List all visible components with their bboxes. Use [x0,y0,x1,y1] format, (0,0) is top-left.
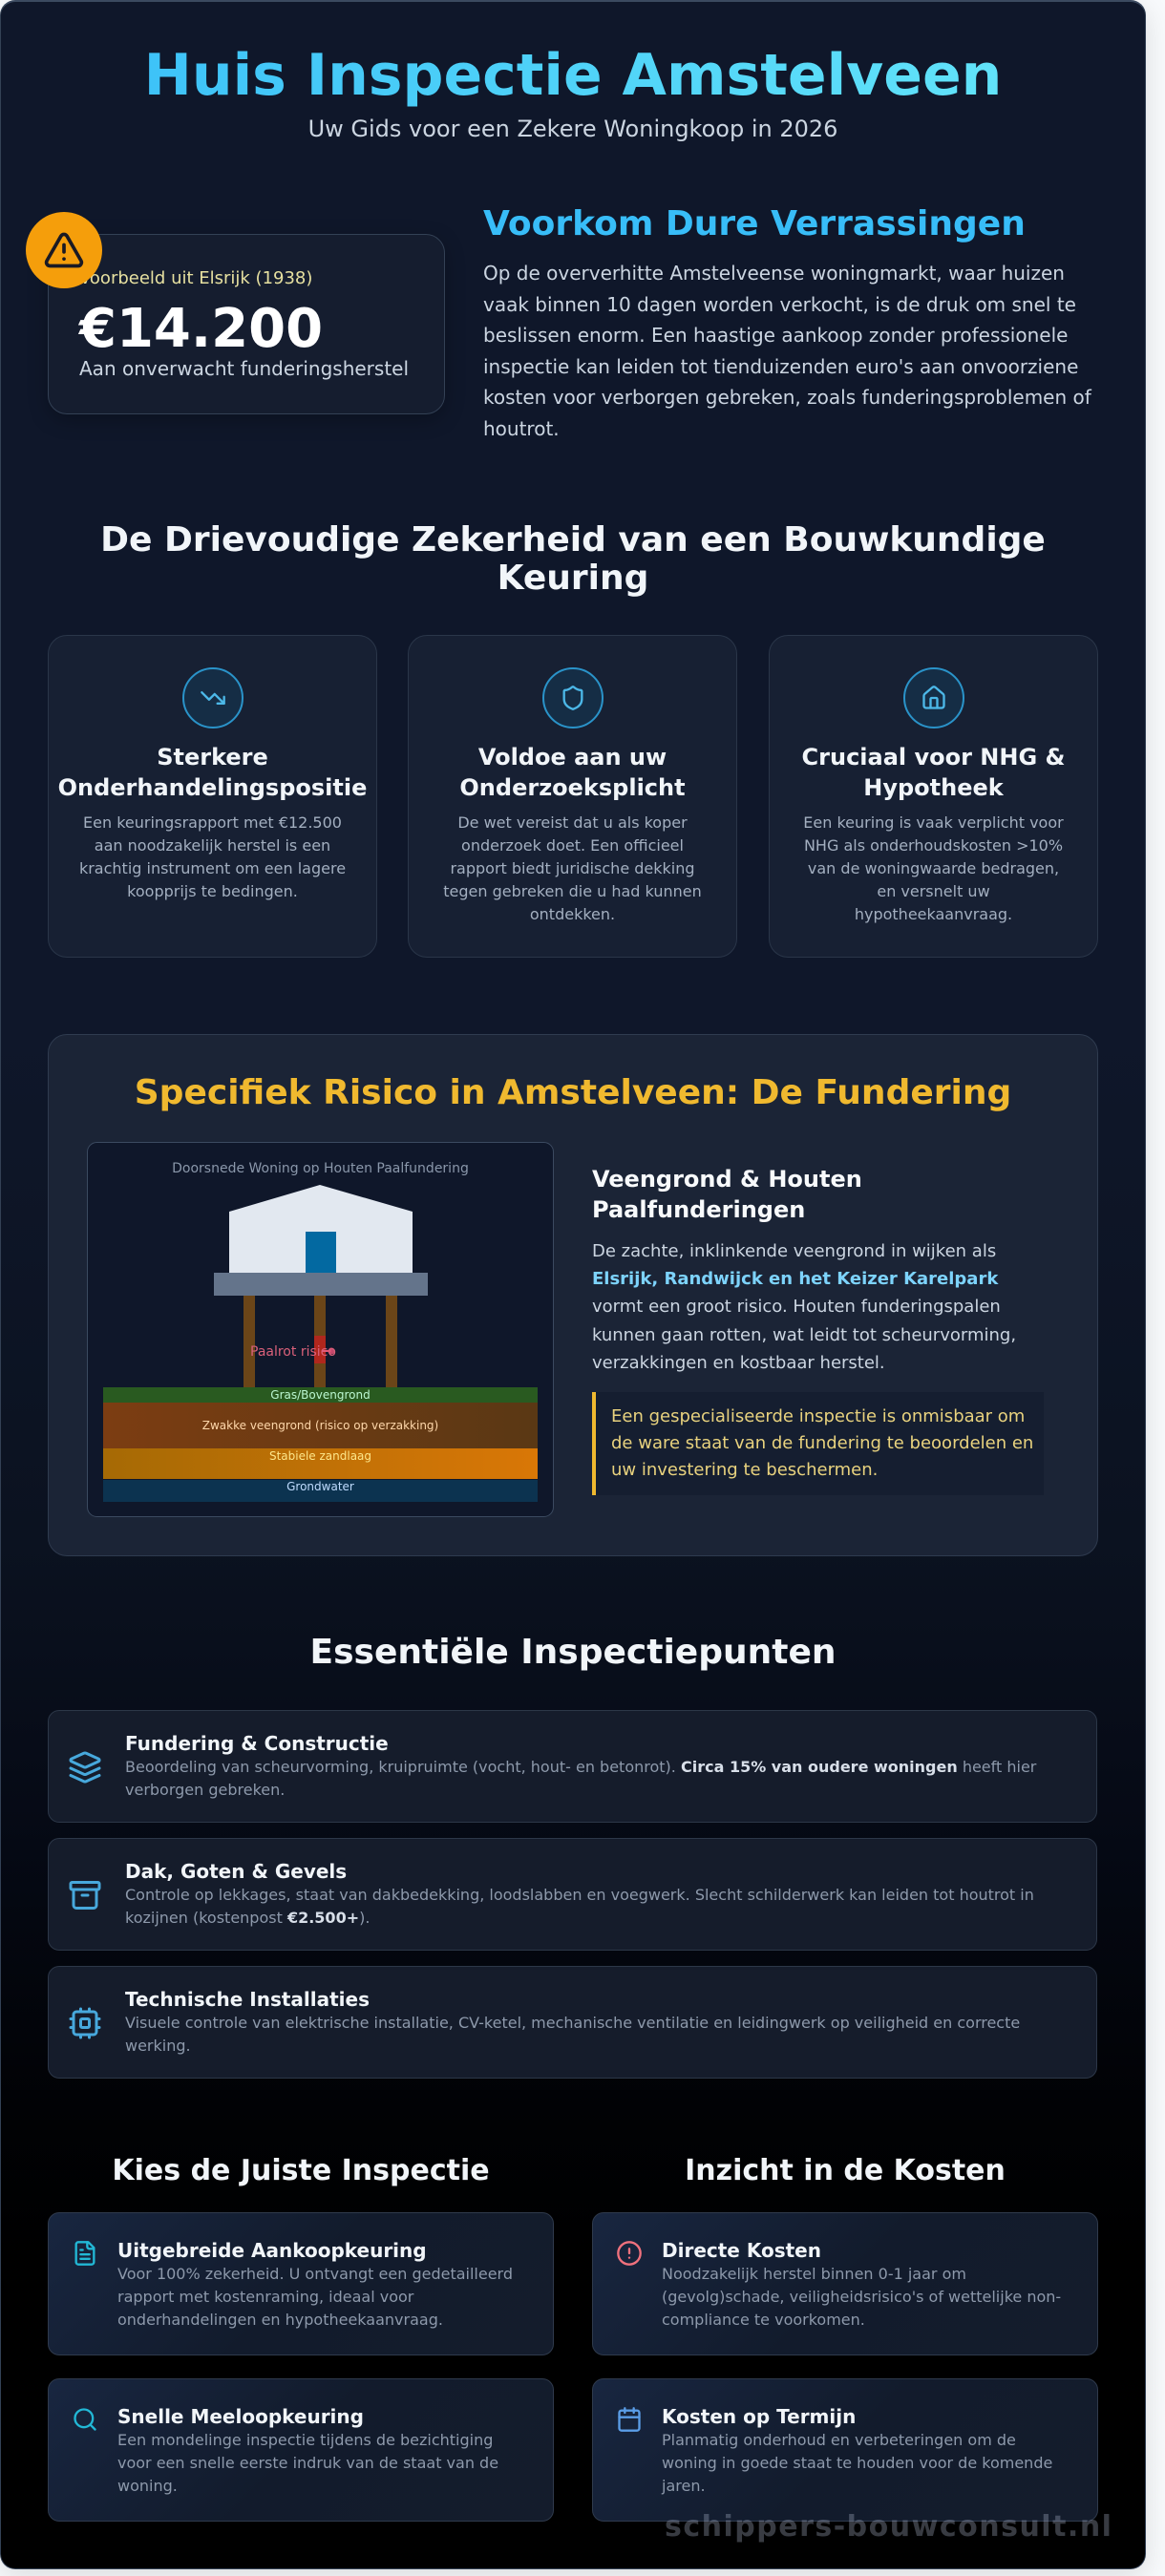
card text: Een keuringsrapport met €12.500 [83,813,342,832]
box text: Voor 100% zekerheid. U ontvangt een gedetailleerd [117,2265,513,2283]
text block: veengrond paragraph: Elsrijk, Randwijck en het Keizer Karelpark [592,1269,998,1289]
callout text: uw investering te beschermen. [611,1460,878,1480]
box text [117,2265,513,2329]
panel: card onderhandelingspositie [48,635,377,958]
house [229,1185,413,1277]
card title: Onderzoeksplicht [459,774,686,801]
text block: intro paragraph: kosten voor verborgen gebreken, zoals funderingsproblemen of [483,386,1091,409]
icon: shield [542,667,604,728]
item text [125,1886,1034,1927]
card text: hypotheekaanvraag. [855,905,1012,923]
box text [117,2431,498,2495]
heading: Veengrond en Houten Paalfunderingen: Paalfunderingen [592,1196,805,1223]
panel: Technische Installaties [48,1966,1097,2079]
panel: Directe Kosten [592,2212,1098,2355]
panel: card onderzoeksplicht [408,635,737,958]
card title [58,744,367,801]
chart: foundation cross-section diagram [87,1142,554,1517]
panel: card NHG en hypotheek [769,635,1098,958]
item text: Beoordeling van scheurvorming, kruipruimte (vocht, hout- en betonrot). Circa 15% van oudere woningen heeft hier [125,1758,1036,1776]
card title: Voldoe aan uw [478,744,667,771]
card text [803,813,1064,923]
text block: veengrond paragraph: vormt een groot risico. Houten funderingspalen [592,1297,1001,1317]
item title: Dak, Goten & Gevels [125,1860,347,1883]
text block: intro paragraph [483,262,1092,440]
panel: fundering risk section [48,1034,1098,1556]
text block: intro paragraph: vaak binnen 10 dagen worden verkocht, is de druk om snel te [483,293,1076,316]
heading: Veengrond en Houten Paalfunderingen: Veengrond & Houten [592,1166,862,1193]
text block: intro paragraph: beslissen enorm. Een haastige aankoop zonder professionele [483,324,1068,347]
chart: foundation cross-section diagram: Doorsnede Woning op Houten Paalfundering [172,1161,469,1176]
heading: Drievoudige Zekerheid: De Drievoudige Zekerheid van een Bouwkundige [100,520,1046,560]
text block: veengrond paragraph: kunnen gaan rotten, wat leidt tot scheurvorming, [592,1325,1016,1345]
box text [662,2265,1061,2329]
box text [661,2431,1052,2495]
card text: aan noodzakelijk herstel is een [95,836,330,855]
subtitle: Uw Gids voor een Zekere Woningkoop in 2026 [308,116,837,142]
card text: Een keuring is vaak verplicht voor [803,813,1064,832]
card title: Cruciaal voor NHG & [802,744,1065,771]
box text: voor een snelle eerste indruk van de staat van de [117,2454,498,2472]
box text: compliance te voorkomen. [662,2311,865,2329]
wooden piles [244,1296,397,1387]
icon: trending down [182,667,244,728]
panel: Dak, Goten en Gevels [48,1838,1097,1951]
icon: file text [74,2241,95,2266]
item text: Visuele controle van elektrische installatie, CV-ketel, mechanische ventilatie en leidingwerk op veiligheid en correcte [125,2014,1020,2032]
card text: onderzoek doet. Een officieel [461,836,684,855]
foundation slab [214,1273,428,1296]
box text: woning in goede staat te houden voor de komende [662,2454,1052,2472]
item text: werking. [125,2037,191,2055]
callout: gespecialiseerde inspectie [592,1392,1044,1495]
heading: Essentiele Inspectiepunten: Essentiële Inspectiepunten [310,1633,836,1672]
pile rot marker: Paalrot risico [250,1344,336,1360]
panel: Fundering en Constructie [48,1710,1097,1823]
text block: intro paragraph: inspectie kan leiden tot tienduizenden euro's aan onvoorziene [483,355,1078,378]
text block: veengrond paragraph: verzakkingen en kostbaar herstel. [592,1353,885,1373]
text block: intro paragraph: houtrot. [483,417,560,440]
text block: veengrond paragraph [592,1241,1016,1373]
icon: circle alert [617,2241,642,2266]
icon: calendar [618,2407,641,2432]
box title: Kosten op Termijn [662,2405,856,2428]
icon: cpu chip [69,2007,101,2039]
box title: Snelle Meeloopkeuring [117,2405,364,2428]
card text: tegen gebreken die u had kunnen [443,882,702,900]
box text: woning. [117,2477,178,2495]
heading: Drievoudige Zekerheid: Keuring [498,559,648,598]
box title: Uitgebreide Aankoopkeuring [117,2239,427,2262]
card title: Hypotheek [863,774,1004,801]
panel: cost example stat card [48,234,445,414]
watermark: schippers-bouwconsult.nl [665,2510,1112,2544]
card title [802,744,1065,801]
box text: onderhandelingen en hypotheekaanvraag. [117,2311,443,2329]
box text: Noodzakelijk herstel binnen 0-1 jaar om [662,2265,966,2283]
box title: Directe Kosten [662,2239,821,2262]
card text: krachtig instrument om een lagere [79,859,346,877]
item text: kozijnen (kostenpost €2.500+). [125,1909,370,1927]
soil layer: grass [103,1387,538,1403]
panel: Snelle Meeloopkeuring [48,2378,554,2522]
callout text [611,1406,1033,1480]
heading: Inzicht in de Kosten: Inzicht in de Kosten [685,2154,1006,2187]
box text: jaren. [662,2477,706,2495]
soil layer: groundwater [103,1480,538,1502]
icon: search [74,2408,96,2431]
stat caption: Aan onverwacht funderingsherstel [79,357,409,380]
text block: veengrond paragraph: De zachte, inklinkende veengrond in wijken als [592,1241,996,1261]
box text: Planmatig onderhoud en verbeteringen om de [662,2431,1016,2449]
heading: Kies de Juiste Inspectie: Kies de Juiste Inspectie [112,2154,490,2187]
card title: Sterkere [157,744,268,771]
card text: en versnelt uw [877,882,990,900]
icon: layers [69,1751,101,1784]
soil layer: groundwater: Grondwater [286,1480,354,1493]
box text: (gevolg)schade, veiligheidsrisico's of wettelijke non- [662,2288,1061,2306]
card text: NHG als onderhoudskosten >10% [804,836,1063,855]
soil layer: peat [103,1403,538,1448]
item text: verborgen gebreken. [125,1781,285,1799]
card text: De wet vereist dat u als koper [457,813,688,832]
title: Huis Inspectie Amstelveen [144,42,1002,109]
item title: Fundering & Constructie [125,1732,389,1755]
card title: Onderhandelingspositie [58,774,367,801]
stat value: €14.200 [79,298,323,360]
icon: archive box [69,1881,101,1910]
heading: Voorkom Dure Verrassingen: Voorkom Dure Verrassingen [483,204,1026,243]
heading: Specifiek Risico: Specifiek Risico in Amstelveen: De Fundering [135,1073,1011,1112]
card text: van de woningwaarde bedragen, [808,859,1059,877]
callout text: Een gespecialiseerde inspectie is onmisbaar om [611,1406,1025,1426]
item text [125,1758,1037,1799]
card title [459,744,686,801]
box text: Een mondelinge inspectie tijdens de bezichtiging [117,2431,493,2449]
soil layer: sand: Stabiele zandlaag [269,1449,371,1463]
panel: Kosten op Termijn [592,2378,1098,2522]
item text [125,2014,1020,2055]
callout text: de ware staat van de fundering te beoordelen en [611,1433,1033,1453]
item title: Technische Installaties [125,1988,370,2011]
pile rot marker [250,1336,336,1363]
soil layer: peat: Zwakke veengrond (risico op verzakking) [202,1419,438,1432]
stat label: Voorbeeld uit Elsrijk (1938) [79,268,312,288]
panel: Uitgebreide Aankoopkeuring [48,2212,554,2355]
box text: rapport met kostenraming, ideaal voor [117,2288,413,2306]
soil layer: grass: Gras/Bovengrond [270,1388,371,1402]
card text [443,813,702,923]
text block: intro paragraph: Op de oververhitte Amstelveense woningmarkt, waar huizen [483,262,1065,285]
icon: house [903,667,964,728]
card text: koopprijs te bedingen. [127,882,298,900]
heading: Drievoudige Zekerheid [100,520,1046,598]
card text [79,813,346,900]
card text: ontdekken. [530,905,615,923]
icon: warning badge [26,212,102,288]
item text: Controle op lekkages, staat van dakbedekking, loodslabben en voegwerk. Slecht schilderwerk kan leiden tot houtrot in [125,1886,1034,1904]
card text: rapport biedt juridische dekking [450,859,695,877]
heading: Veengrond en Houten Paalfunderingen [592,1166,862,1223]
soil layer: sand [103,1448,538,1479]
